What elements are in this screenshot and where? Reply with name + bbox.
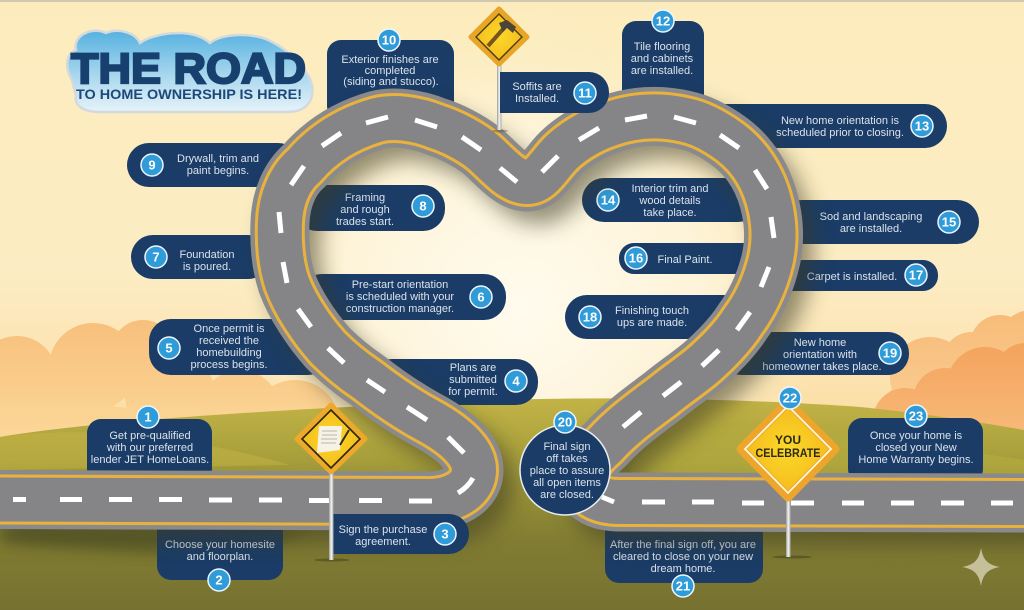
step 17 <box>770 260 938 291</box>
step 11: 11 <box>578 86 592 100</box>
title: The Road to Home Ownership: THE ROAD <box>71 45 306 93</box>
step 21 <box>605 515 763 597</box>
step 8 <box>295 185 445 231</box>
step 10: 10 <box>382 32 396 48</box>
step 8: Framing <box>345 192 385 204</box>
step 18: ups are made. <box>617 317 687 329</box>
step 16: 16 <box>629 250 643 266</box>
step 4 <box>370 359 538 405</box>
step 11: Soffits are <box>512 81 562 93</box>
step 20: place to assure <box>530 465 604 477</box>
step 23: 23 <box>909 408 923 424</box>
step 1: lender JET HomeLoans. <box>91 454 209 466</box>
step 9: paint begins. <box>187 165 249 177</box>
step 18: Finishing touch <box>615 305 689 317</box>
step 23: Once your home is <box>870 430 963 442</box>
step 20: are closed. <box>540 489 594 501</box>
step 8: and rough <box>340 204 390 216</box>
step 3: agreement. <box>355 536 411 548</box>
step 20: all open items <box>533 477 601 489</box>
step 10: (siding and stucco). <box>343 76 439 88</box>
step 7: 7 <box>152 250 160 264</box>
step 15: Sod and landscaping <box>820 211 922 223</box>
step 1: 1 <box>144 410 152 424</box>
step 6: is scheduled with your <box>346 291 454 303</box>
step 13: scheduled prior to closing. <box>776 127 904 139</box>
step 19: orientation with <box>783 349 857 361</box>
step 2: Choose your homesite <box>165 539 275 551</box>
step 9: Drywall, trim and <box>177 153 259 165</box>
step 4: Plans are <box>450 362 496 374</box>
step 21: dream home. <box>651 563 715 575</box>
icon: contract document <box>317 426 349 453</box>
step 23: Home Warranty begins. <box>858 454 974 466</box>
step 5: homebuilding <box>196 347 262 359</box>
step 16 <box>619 243 760 274</box>
step 16: Final Paint. <box>657 254 713 266</box>
step 12: and cabinets <box>631 53 694 65</box>
road centre dashes <box>13 116 1013 503</box>
step 23 <box>848 405 983 483</box>
step 20: Final sign <box>543 441 591 453</box>
road shadow <box>2 130 1024 517</box>
step 4: for permit. <box>448 386 498 398</box>
step 7: Foundation <box>179 249 235 261</box>
step 6: Pre-start orientation <box>352 279 448 291</box>
step 4: submitted <box>449 374 497 386</box>
step 11 <box>500 72 609 113</box>
step 5: received the <box>199 335 259 347</box>
step 15: 15 <box>942 214 956 230</box>
step 1: Get pre-qualified <box>109 430 191 442</box>
step 12: 12 <box>656 14 670 28</box>
step 8: 8 <box>419 198 427 214</box>
step 17: Carpet is installed. <box>807 271 897 283</box>
green hills <box>0 398 1024 610</box>
step 3 <box>332 514 469 554</box>
step 6: 6 <box>477 290 485 304</box>
you celebrate sign: CELEBRATE <box>756 446 820 460</box>
left orange clouds <box>0 320 340 470</box>
sparkle icon <box>962 548 1000 586</box>
step 20 <box>520 411 610 515</box>
you celebrate sign: 22 <box>783 390 797 406</box>
step 2: and floorplan. <box>187 551 253 563</box>
step 19: New home <box>794 337 846 349</box>
right front clouds <box>873 343 1024 452</box>
step 23: closed your New <box>875 442 957 454</box>
step 20: off takes <box>546 453 588 465</box>
step 14: 14 <box>601 192 616 208</box>
icon: hammer <box>488 20 516 46</box>
step 21: cleared to close on your new <box>613 551 753 563</box>
step 5: 5 <box>165 340 173 356</box>
step 18 <box>565 295 745 339</box>
step 6 <box>300 274 506 320</box>
you celebrate sign: YOU <box>775 433 801 447</box>
step 9: 9 <box>148 158 156 172</box>
title: The Road to Home Ownership <box>67 31 312 112</box>
step 10: completed <box>365 65 415 77</box>
step 5 <box>149 319 330 375</box>
right back clouds <box>862 310 1024 440</box>
winding road <box>0 116 1024 503</box>
step 2 <box>157 515 283 591</box>
step 7 <box>131 235 270 279</box>
step 15: are installed. <box>840 223 902 235</box>
step 15 <box>780 200 979 244</box>
step 14: Interior trim and <box>631 183 709 195</box>
step 20: 20 <box>558 414 572 430</box>
step 1: with our preferred <box>106 442 193 454</box>
step 5: Once permit is <box>194 323 265 335</box>
purchase agreement sign <box>297 405 365 562</box>
step 8: trades start. <box>336 216 394 228</box>
step 10: Exterior finishes are <box>341 54 439 66</box>
step 3: 3 <box>441 526 449 542</box>
step 13: New home orientation is <box>781 115 899 127</box>
step 7: is poured. <box>183 261 231 273</box>
step 19: 19 <box>883 346 897 360</box>
step 17: 17 <box>909 268 923 282</box>
step 5: process begins. <box>190 359 268 371</box>
step 19 <box>720 332 909 375</box>
step 12: are installed. <box>631 65 693 77</box>
step 1 <box>87 406 212 484</box>
step 21: After the final sign off, you are <box>610 539 756 551</box>
title: The Road to Home Ownership: TO HOME OWNERSHIP IS HERE! <box>76 86 302 102</box>
step 14: wood details <box>638 195 701 207</box>
step 13: 13 <box>915 118 929 134</box>
step 3: Sign the purchase <box>339 524 427 536</box>
step 2: 2 <box>215 572 223 588</box>
hammer sign <box>471 9 527 132</box>
step 13 <box>700 104 947 148</box>
step 10 <box>327 29 454 120</box>
step 4: 4 <box>512 374 520 388</box>
step 9 <box>127 143 300 187</box>
step 19: homeowner takes place. <box>762 361 882 373</box>
step 12 <box>622 10 704 111</box>
step 18: 18 <box>583 310 597 324</box>
step 21: 21 <box>676 578 690 594</box>
step 14 <box>582 178 760 222</box>
step 11: Installed. <box>515 93 559 105</box>
step 6: construction manager. <box>346 303 454 315</box>
step 14: take place. <box>643 207 697 219</box>
you celebrate sign <box>741 387 835 558</box>
step 12: Tile flooring <box>634 41 690 53</box>
